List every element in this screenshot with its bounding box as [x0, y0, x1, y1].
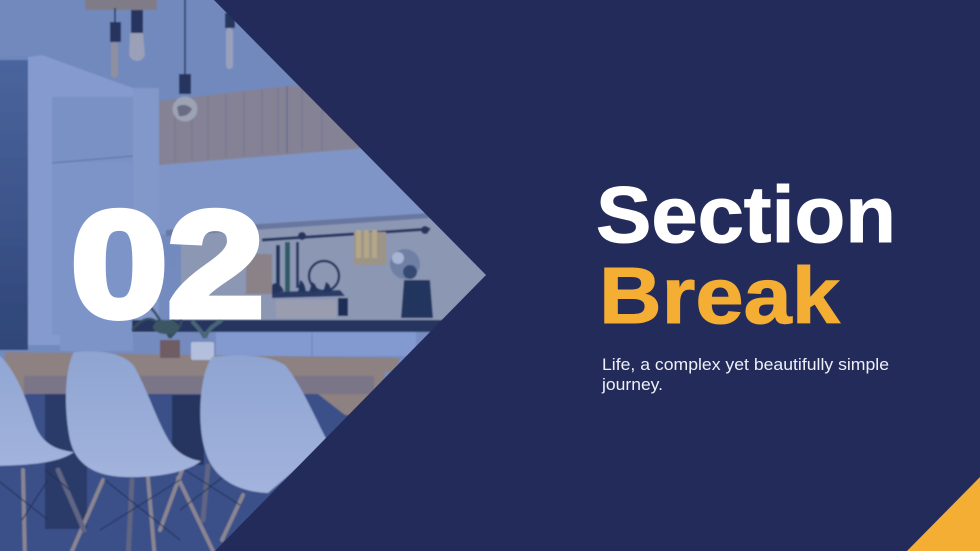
photo: kitchen with blue overlay: [0, 0, 510, 551]
upper wall cabinets: [160, 149, 424, 234]
counter: [132, 320, 472, 332]
title line: Break: Break: [599, 251, 841, 340]
chairs: [0, 340, 328, 493]
wood panel: [159, 84, 380, 165]
pendant lights: [85, 0, 235, 122]
table: [5, 352, 400, 415]
rail and utensils: [246, 226, 433, 318]
dark left wall: [0, 60, 28, 350]
subtitle: journey.: [601, 375, 663, 394]
title line: Section: Section: [596, 170, 896, 259]
tall cabinets: [28, 55, 159, 345]
ceiling and wall: [0, 54, 431, 378]
chair legs: [0, 466, 243, 551]
floor: [0, 393, 349, 551]
subtitle: Life, a complex yet beautifully simple: [602, 355, 889, 374]
plants: [130, 307, 224, 361]
corner accent triangle: [907, 477, 980, 551]
backsplash: [181, 213, 490, 320]
section number: 02: [71, 180, 264, 348]
